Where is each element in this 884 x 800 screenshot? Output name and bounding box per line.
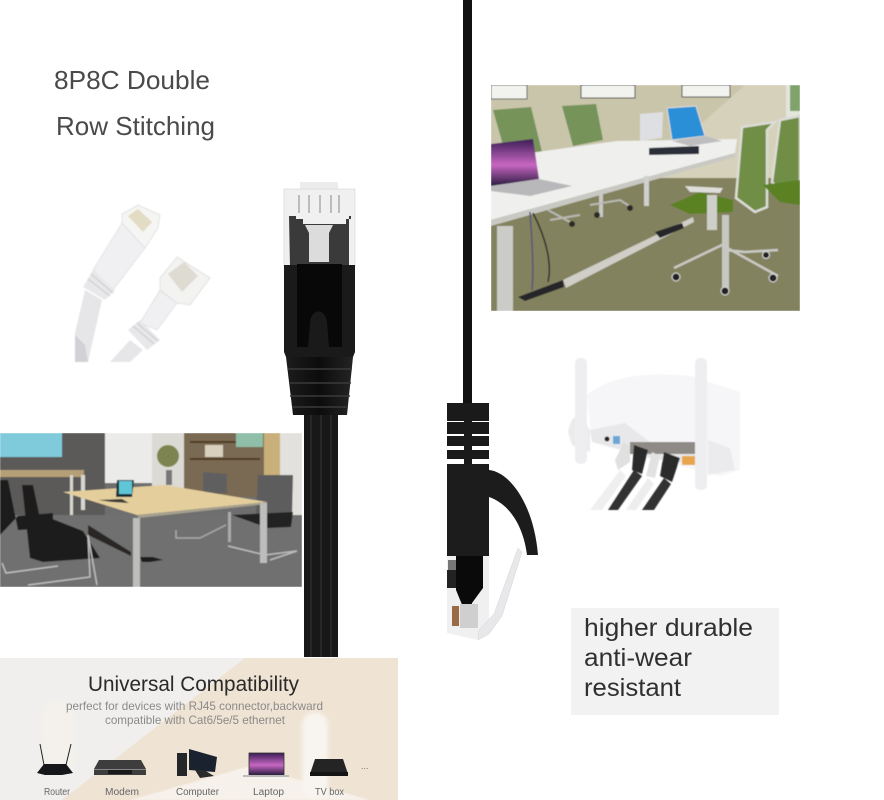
flat cable: [304, 415, 338, 657]
device labels: Router: [44, 787, 71, 798]
plug body: [284, 265, 355, 357]
photo: office meeting room: [0, 433, 302, 587]
device labels: Modem: [105, 787, 139, 798]
thin cable: [463, 0, 472, 404]
panel description: compatible with Cat6/5e/5 ethernet: [105, 713, 286, 727]
heading: 8P8C Double Row Stitching: [54, 65, 215, 141]
more devices ellipsis: ...: [361, 761, 369, 771]
panel heading: Universal Compatibility: [88, 673, 299, 696]
icon: modem: [94, 760, 146, 775]
black flat cable, front plug: [284, 182, 355, 657]
device labels: [44, 788, 344, 797]
panel description: perfect for devices with RJ45 connector,backward: [66, 699, 323, 713]
icon: TV box: [310, 759, 348, 776]
callout: higher durable, anti-wear, resistant: anti-wear: [584, 644, 692, 672]
callout: higher durable, anti-wear, resistant: higher durable: [584, 614, 753, 642]
callout: higher durable, anti-wear, resistant: resistant: [584, 674, 681, 702]
plug body: [447, 464, 489, 556]
callout: higher durable, anti-wear, resistant: [571, 608, 779, 715]
device labels: Laptop: [253, 787, 284, 798]
photo: conference table with laptops: [491, 85, 800, 311]
panel description: [66, 702, 322, 726]
clear plug housing: [284, 182, 355, 267]
clear plug tip: [447, 556, 489, 640]
black flat cable, side plug: [447, 0, 538, 640]
photo: white flat cable plugs: [75, 205, 210, 362]
strain relief boot: [286, 357, 353, 415]
latch: [489, 470, 538, 555]
heading: 8P8C Double Row Stitching: Row Stitching: [56, 111, 215, 141]
photo: white router with cables: [568, 358, 740, 510]
icon: computer: [177, 749, 217, 778]
boot ribs: [447, 403, 489, 464]
panel background: [0, 658, 398, 800]
heading: 8P8C Double Row Stitching: 8P8C Double: [54, 65, 210, 95]
device labels: TV box: [315, 787, 344, 798]
panel: Universal Compatibility: [0, 658, 398, 800]
icon: router: [37, 744, 73, 775]
device labels: Computer: [176, 787, 220, 798]
icon: laptop: [243, 753, 289, 777]
